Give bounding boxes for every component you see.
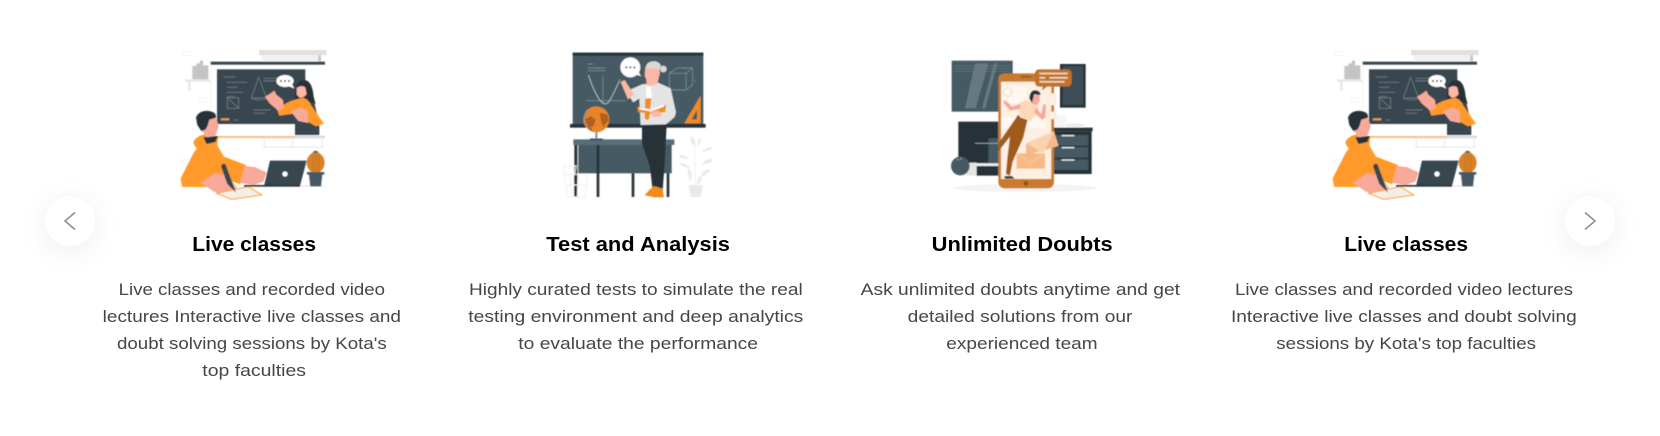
description: test and analysis: Highly curated tests to simulate the real <box>469 280 803 299</box>
card: live classes <box>103 234 401 380</box>
heading: live classes repeat: Live classes <box>1344 234 1468 256</box>
student <box>181 135 246 187</box>
description: live classes: lectures Interactive live classes and <box>103 307 401 326</box>
illustration: test and analysis <box>563 53 713 197</box>
description: live classes <box>103 280 401 380</box>
illustration: live classes <box>181 50 327 199</box>
basket <box>563 166 588 197</box>
arrow: previous button <box>43 196 97 253</box>
heading: test and analysis: Test and Analysis <box>546 234 730 256</box>
description: unlimited doubts <box>861 280 1180 353</box>
description: live classes: doubt solving sessions by Kota's <box>117 334 387 353</box>
description: live classes repeat: Live classes and recorded video lectures <box>1235 280 1573 299</box>
description: test and analysis: testing environment and deep analytics <box>468 307 803 326</box>
description: unlimited doubts: Ask unlimited doubts anytime and get <box>861 280 1180 299</box>
arrow: next button <box>1563 196 1617 253</box>
description: live classes repeat: sessions by Kota's top faculties <box>1276 334 1536 353</box>
description: live classes repeat: Interactive live classes and doubt solving <box>1231 307 1577 326</box>
description: live classes: top faculties <box>202 361 306 380</box>
illustration: unlimited doubts <box>951 61 1097 192</box>
chat bubble <box>1035 69 1072 91</box>
plant <box>680 136 713 197</box>
woman <box>998 116 1027 176</box>
heading: live classes: Live classes <box>192 234 316 256</box>
description: unlimited doubts: detailed solutions from our <box>908 307 1133 326</box>
teacher <box>642 125 667 190</box>
globe <box>590 139 603 140</box>
card: unlimited doubts <box>861 234 1180 353</box>
heading: unlimited doubts: Unlimited Doubts <box>932 234 1113 256</box>
illustration: live classes repeat <box>1333 50 1479 199</box>
teacher <box>295 80 316 104</box>
description: unlimited doubts: experienced team <box>946 334 1098 353</box>
description: live classes repeat <box>1231 280 1577 353</box>
card: test and analysis <box>468 234 803 353</box>
card: live classes repeat <box>1231 234 1577 353</box>
description: test and analysis <box>468 280 803 353</box>
phone <box>998 73 1054 188</box>
description: test and analysis: to evaluate the performance <box>518 334 758 353</box>
description: live classes: Live classes and recorded video <box>119 280 385 299</box>
